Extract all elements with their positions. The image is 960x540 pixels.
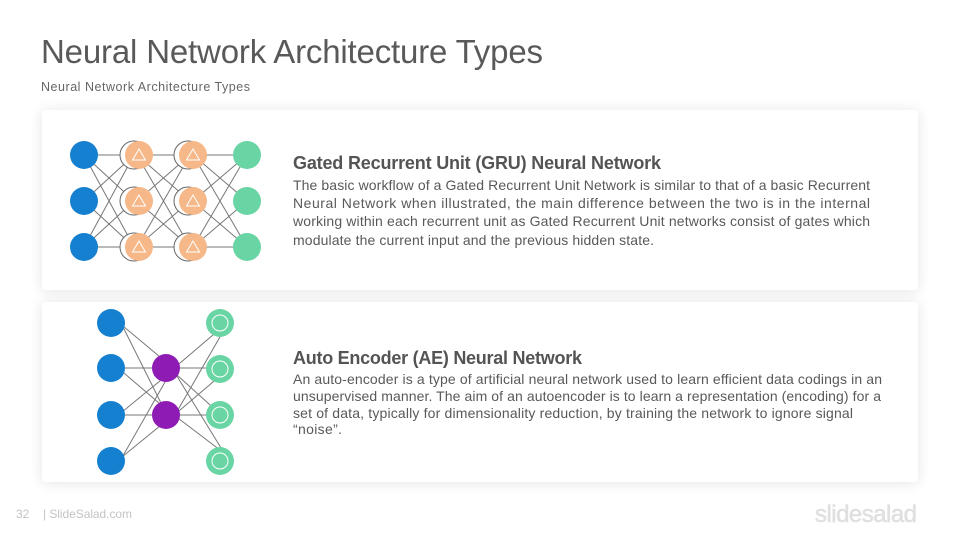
- text block: GRU description: modulate the current input and the previous hidden state.: [293, 232, 654, 248]
- text block: GRU description: Neural Network when illustrated, the main difference between the two is in the internal: [293, 195, 870, 211]
- panel: GRU card: [42, 110, 918, 290]
- logo: slidesalad: slidesalad: [815, 501, 917, 528]
- diagram: Auto Encoder network: [97, 309, 234, 475]
- text block: Auto Encoder description: An auto-encoder is a type of artificial neural network used to learn efficient data codings in an: [293, 371, 882, 387]
- diagram: GRU network: [70, 141, 261, 261]
- text block: Auto Encoder description: set of data, typically for dimensionality reduction, by training the network to ignore signal: [293, 405, 853, 421]
- title: Neural Network Architecture Types: [41, 33, 543, 70]
- panel: AE card: [42, 302, 918, 482]
- heading: GRU: Gated Recurrent Unit (GRU) Neural Network: [293, 153, 662, 173]
- footer text: | SlideSalad.com: [43, 507, 132, 521]
- text block: GRU description: working within each recurrent unit as Gated Recurrent Unit networks consist of gates which: [292, 213, 870, 229]
- subtitle: Neural Network Architecture Types: [41, 80, 250, 94]
- text block: Auto Encoder description: unsupervised manner. The aim of an autoencoder is to learn a representation (encoding) for a: [293, 388, 881, 404]
- text block: Auto Encoder description: [293, 371, 882, 437]
- text block: GRU description: [292, 177, 870, 248]
- text block: GRU description: The basic workflow of a Gated Recurrent Unit Network is similar to that of a basic Recurrent: [293, 177, 870, 193]
- heading: Auto Encoder: Auto Encoder (AE) Neural Network: [293, 348, 583, 368]
- text block: Auto Encoder description: “noise”.: [293, 421, 342, 437]
- page number: 32: [16, 507, 30, 521]
